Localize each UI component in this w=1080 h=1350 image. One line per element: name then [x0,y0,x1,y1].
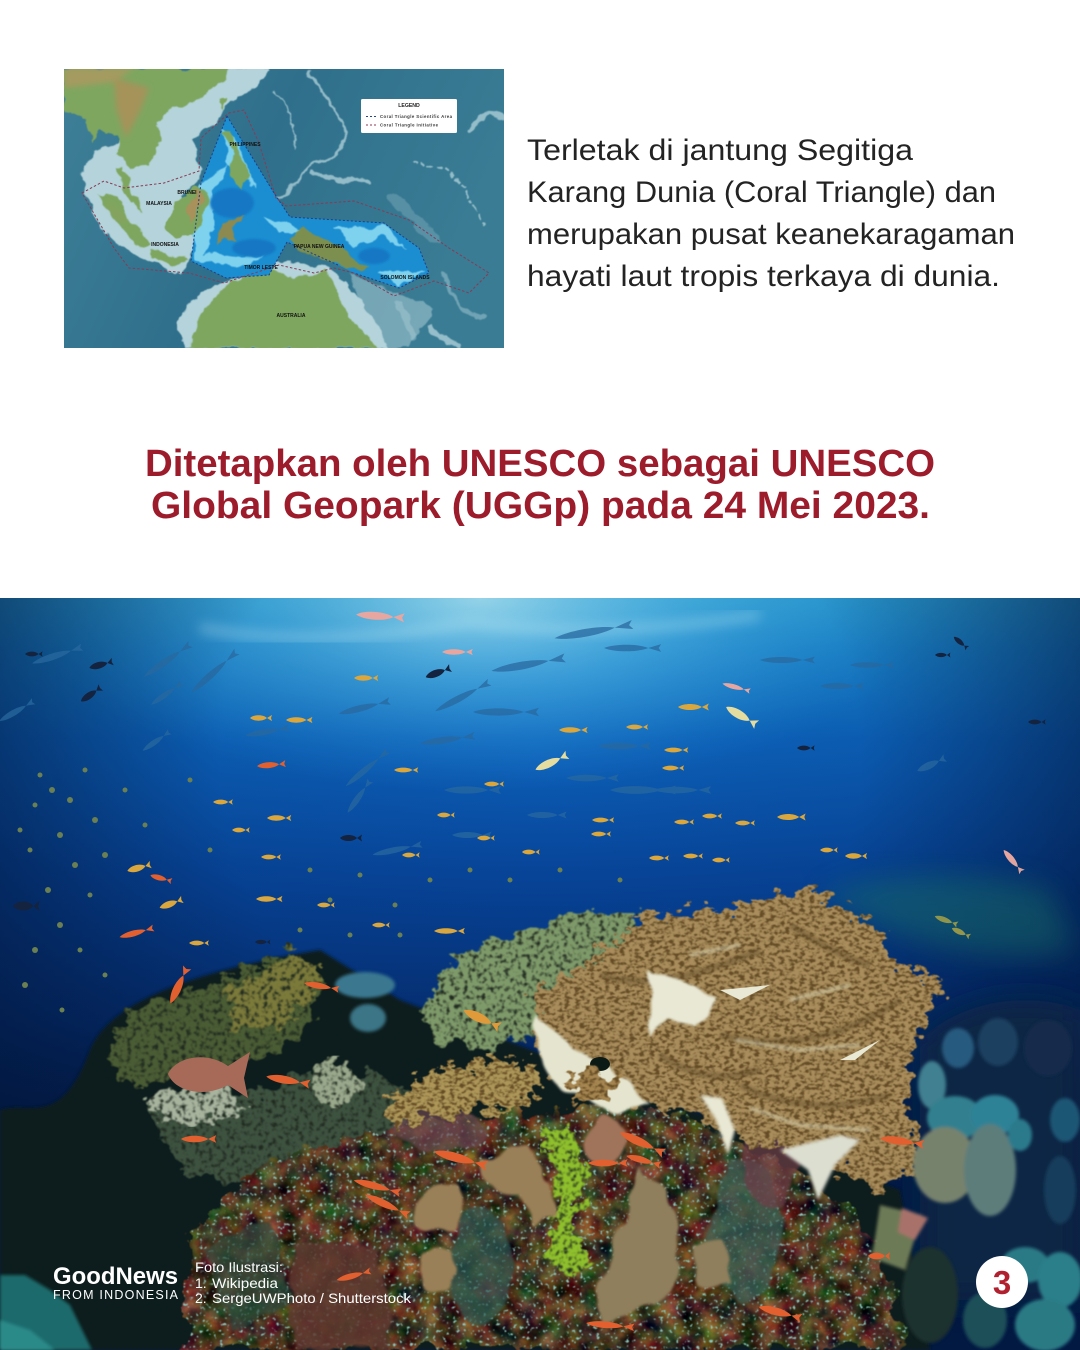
legend: Coral Triangle Initiative [380,122,439,128]
map labels [146,142,430,319]
land masses [64,68,379,348]
body text: Coral Triangle description [527,134,1015,293]
heading: UNESCO Global Geopark statement: Ditetapkan oleh UNESCO sebagai UNESCO [145,443,935,485]
crinoid green [545,1125,592,1278]
body text: Coral Triangle description: merupakan pusat keanekaragaman [527,218,1015,251]
left reef mound [105,950,410,1190]
dark reef base [0,950,930,1350]
page number badge: 3 [993,1264,1011,1301]
tan sponges [415,1116,732,1325]
shallow shelves [82,68,434,348]
highland relief [64,68,204,223]
photo credit caption [195,1259,412,1306]
orange anthias fish [119,760,924,1331]
body text: Coral Triangle description: Karang Dunia (Coral Triangle) dan [527,176,996,209]
map labels: MALAYSIA [146,201,172,207]
logo: GoodNews from Indonesia [53,1263,179,1302]
blue bubble corals [872,1018,1080,1350]
legend [361,99,457,133]
coral triangle initiative boundary [82,110,489,296]
pale yellow fish [534,703,759,774]
logo: GoodNews from Indonesia: FROM INDONESIA [53,1288,179,1302]
tuna school silhouettes [0,620,947,858]
map labels: PHILIPPINES [229,142,261,148]
map labels: INDONESIA [151,242,179,248]
small distant fish [18,768,622,1012]
pale and pink fish [356,610,1025,874]
map labels: TIMOR LESTE [244,265,278,271]
photo credit caption: 2. [195,1290,207,1306]
map labels: BRUNEI [177,190,197,196]
anthias school [126,675,971,946]
legend: LEGEND [398,103,420,109]
large mauve fish [168,1052,250,1098]
photo: underwater coral reef [0,598,1080,1350]
ocean ridges [274,70,504,348]
map labels: SOLOMON ISLANDS [380,275,430,281]
heading: UNESCO Global Geopark statement: Global Geopark (UGGp) pada 24 Mei 2023. [151,485,930,527]
page number badge [976,1256,1028,1308]
water background [0,598,1080,1350]
bottom-left teal coral [0,1275,92,1350]
map: Coral Triangle [64,69,504,348]
deep right reef [920,1000,1080,1300]
map labels: PAPUA NEW GUINEA [294,244,345,250]
body text: Coral Triangle description: Terletak di jantung Segitiga [527,134,913,167]
green soft coral behind [425,915,640,1050]
faint green school haze [820,876,1075,956]
legend: Coral Triangle Scientific Area [380,114,453,119]
photo credit caption: SergeUWPhoto / Shutterstock [212,1290,412,1306]
logo: GoodNews from Indonesia: GoodNews [53,1263,178,1290]
photo credit caption: Wikipedia [212,1275,278,1291]
coral triangle scientific area [164,116,429,288]
photo credit caption: 1. [195,1275,207,1291]
dark fish [13,635,1046,944]
photo credit caption: Foto Ilustrasi: [195,1259,283,1275]
colourful lower reef [185,1105,905,1350]
soft coral leather tree [385,888,945,1200]
heading: UNESCO Global Geopark statement [145,443,935,527]
body text: Coral Triangle description: hayati laut tropis terkaya di dunia. [527,260,1000,293]
map labels: AUSTRALIA [277,313,306,319]
